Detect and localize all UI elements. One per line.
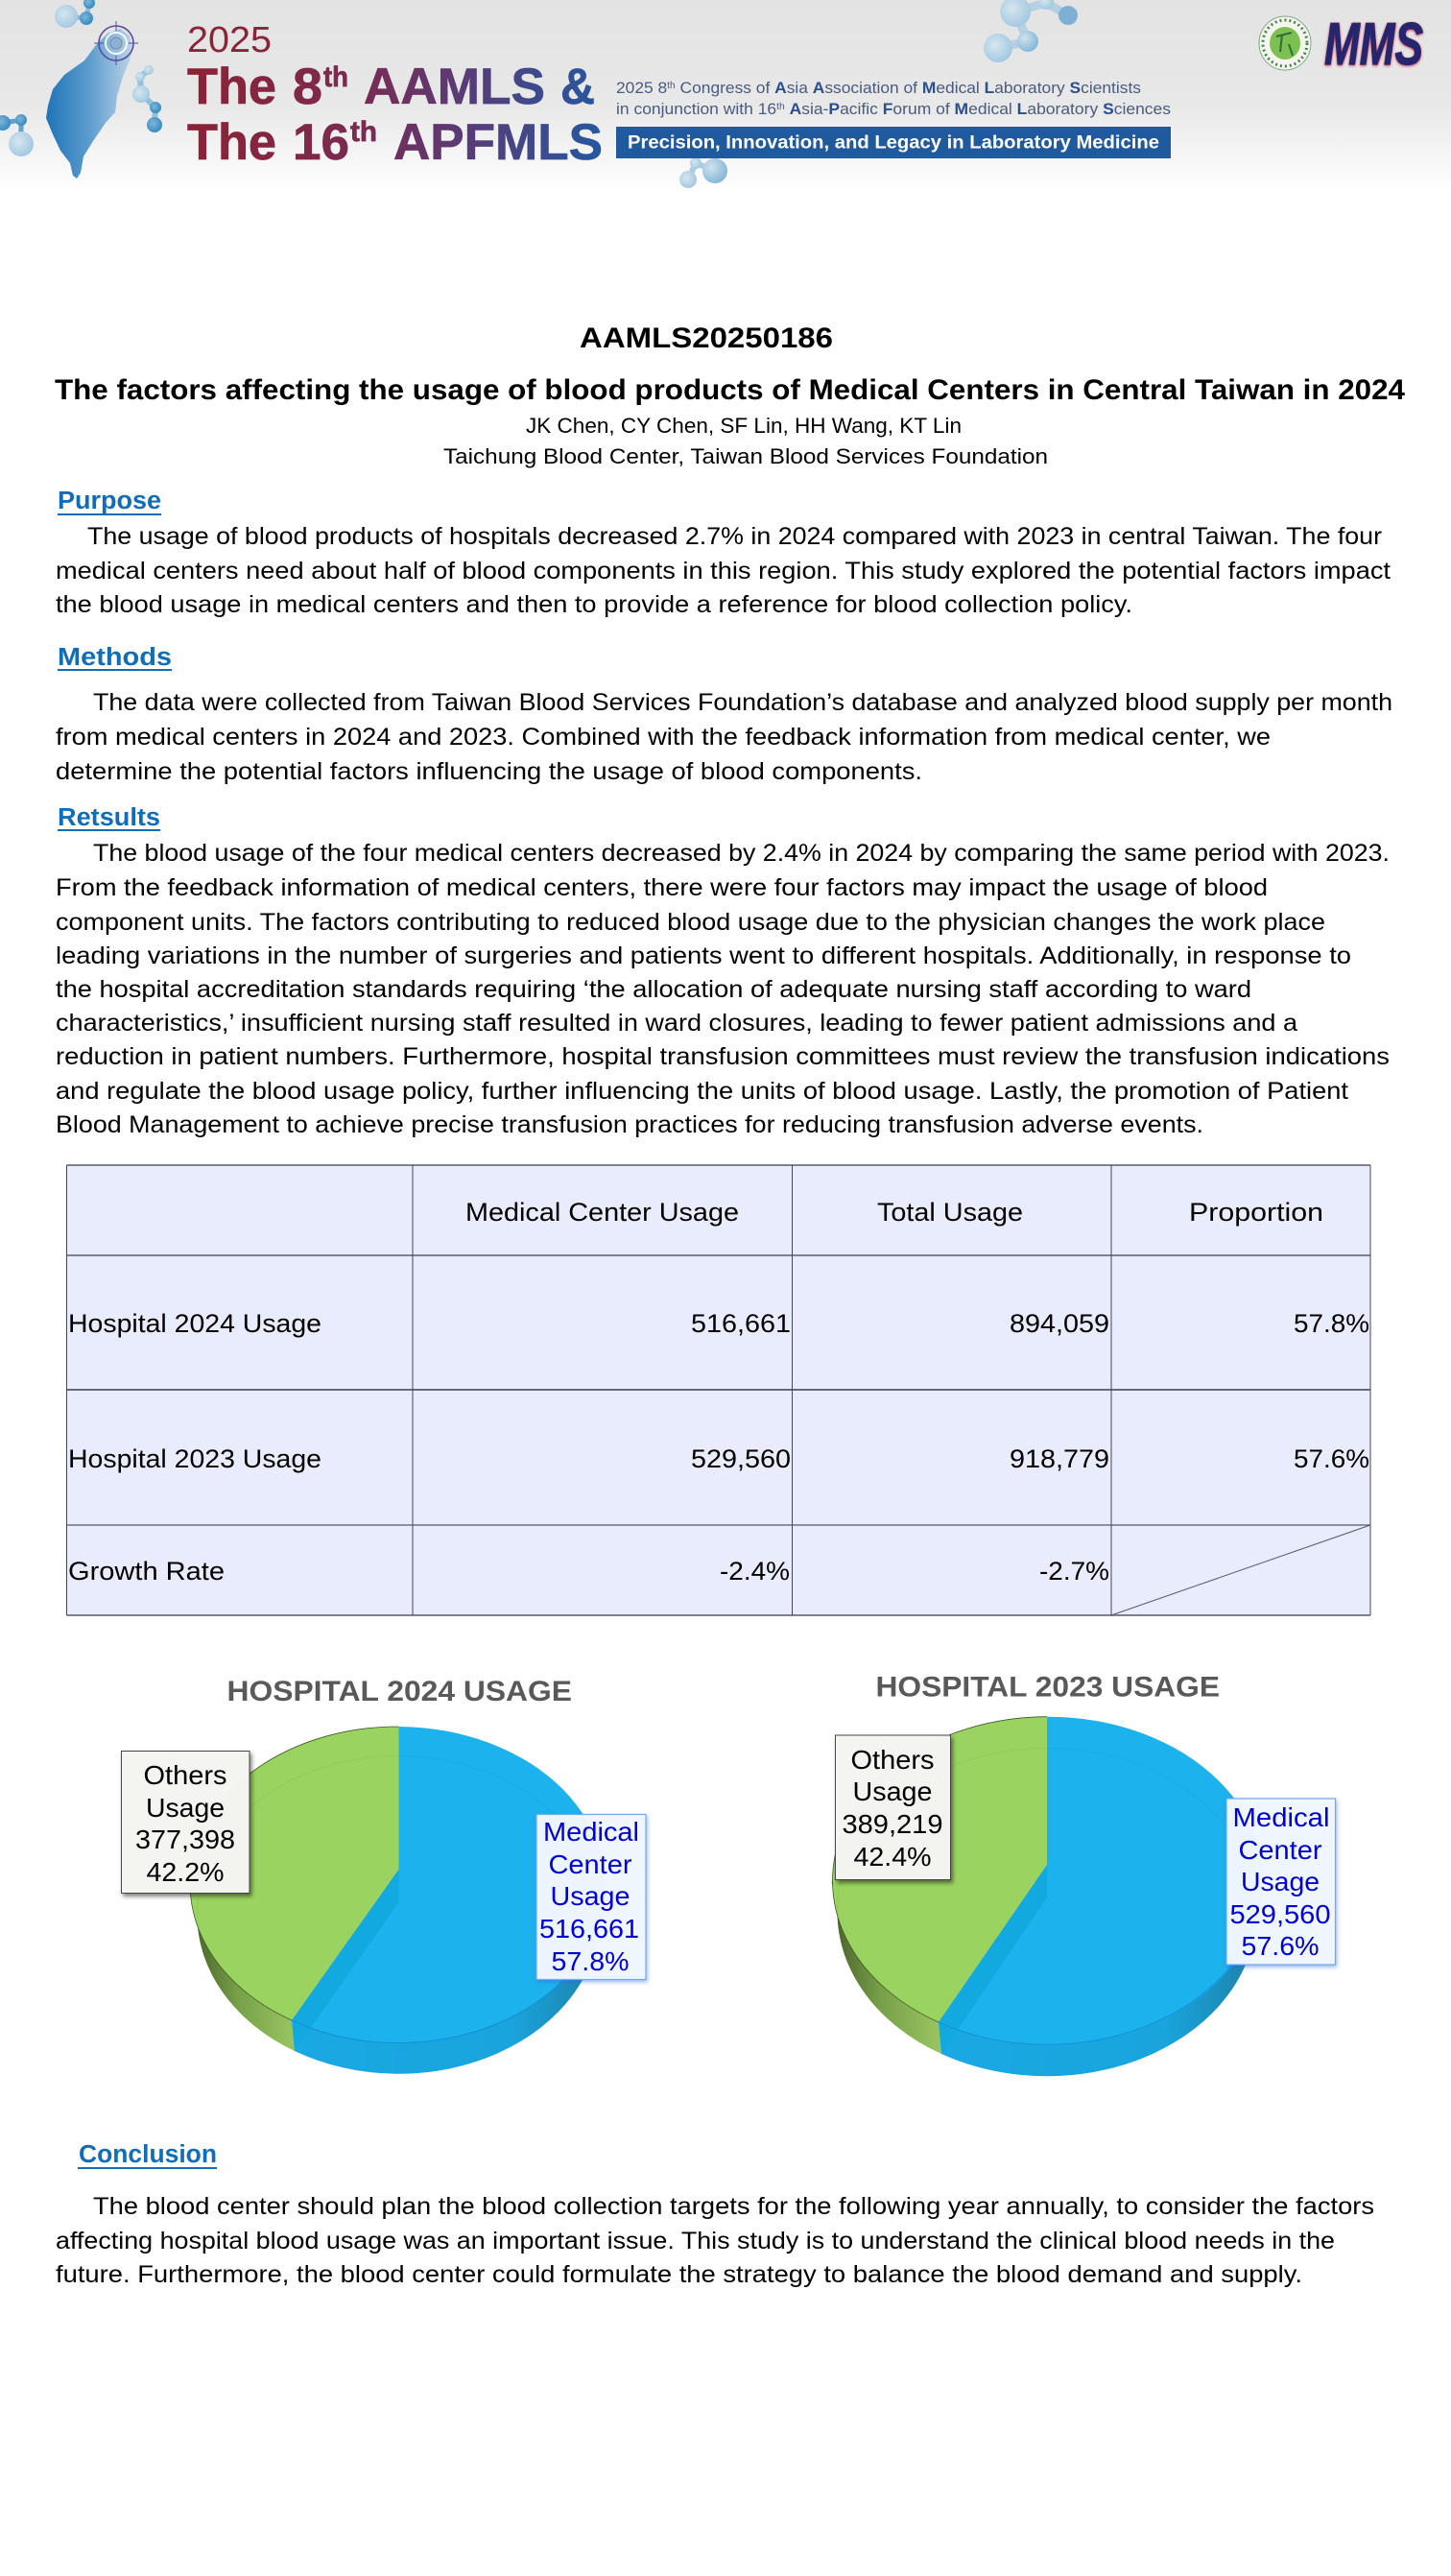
pie side walls — [191, 1885, 606, 2074]
label: medical center: 516,661 — [539, 1914, 639, 1944]
table row: Hospital 2024 Usage: 516,661 — [691, 1309, 791, 1338]
congress subtitle — [616, 79, 1171, 118]
text block: methods: from medical centers in 2024 and 2023. Combined with the feedback information from medical center, we — [56, 724, 1271, 751]
label: medical center — [1226, 1799, 1336, 1965]
heading: Conclusion: Conclusion — [79, 2141, 217, 2168]
conference name: APFMLS — [393, 114, 603, 171]
affiliation: Taichung Blood Center, Taiwan Blood Services Foundation — [443, 444, 1048, 468]
text block: results: Blood Management to achieve precise transfusion practices for reducing transfusion adverse events. — [56, 1111, 1203, 1138]
conference name: 8 — [293, 59, 322, 115]
label: medical center: 57.8% — [551, 1946, 630, 1976]
text block: results: From the feedback information of medical centers, there were four factors may impact the usage of blood — [56, 874, 1268, 901]
conference name: th — [323, 61, 348, 93]
heading: Purpose: Purpose — [58, 488, 161, 514]
label: medical center: 529,560 — [1230, 1899, 1330, 1929]
text block: purpose: The usage of blood products of hospitals decreased 2.7% in 2024 compared with 2023 in central Taiwan. The four — [87, 523, 1382, 550]
table header row: Total Usage — [877, 1198, 1023, 1227]
theme bar — [616, 127, 1171, 158]
text block: results: component units. The factors contributing to reduced blood usage due to the physician changes the work place — [56, 909, 1325, 936]
text block: results — [56, 840, 1390, 1138]
label: medical center: Center — [1238, 1835, 1322, 1865]
conference name — [187, 20, 603, 171]
text block: results: characteristics,’ insufficient nursing staff resulted in ward closures, leading to fewer patient admissions and a — [56, 1010, 1297, 1037]
slice: others — [833, 1717, 1047, 2022]
header banner — [0, 0, 1451, 192]
authors: JK Chen, CY Chen, SF Lin, HH Wang, KT Lin — [526, 414, 962, 438]
conference name: AAMLS — [364, 59, 545, 115]
conference name: 16 — [293, 114, 349, 171]
abstract ID: AAMLS20250186 — [580, 322, 833, 354]
label: others: Others — [144, 1760, 226, 1790]
label: medical center: Usage — [551, 1881, 630, 1911]
congress subtitle: Asia Association of Medical Laboratory Scientists — [774, 79, 1140, 97]
table row: Hospital 2023 Usage: Hospital 2023 Usage — [68, 1444, 321, 1473]
label: medical center: Center — [549, 1849, 631, 1879]
label: medical center — [536, 1814, 646, 1979]
text block: conclusion: affecting hospital blood usage was an important issue. This study is to understand the clinical blood needs in the — [56, 2228, 1335, 2254]
text block: purpose: medical centers need about half of blood components in this region. This study explored the potential factors impact — [56, 558, 1391, 584]
congress subtitle: 2025 8 — [616, 79, 666, 97]
slice: others — [190, 1727, 398, 2020]
pie chart: Hospital 2023 usage — [831, 1672, 1336, 2076]
text block: results: leading variations in the number of surgeries and patients went to different hospitals. Additionally, in response to — [56, 942, 1351, 969]
table row: Hospital 2024 Usage — [68, 1309, 1369, 1338]
label: others: Usage — [852, 1777, 933, 1806]
conference name: & — [560, 59, 595, 115]
label: medical center: 57.6% — [1242, 1931, 1319, 1961]
molecule: far left — [0, 114, 34, 156]
table row: Hospital 2023 Usage: 57.6% — [1294, 1444, 1369, 1473]
conference name: The — [187, 59, 276, 115]
slice: medical center — [292, 1727, 605, 2042]
congress subtitle: th — [776, 102, 785, 112]
pie chart: Hospital 2024 usage — [121, 1676, 646, 2074]
data table — [67, 1165, 1370, 1615]
text block: methods: determine the potential factors influencing the usage of blood components. — [56, 758, 922, 785]
title: The factors affecting the usage of blood products of Medical Centers in Central Taiwan in 2024 — [55, 374, 1405, 406]
molecule: top centre — [984, 0, 1078, 62]
table header row: Proportion — [1189, 1198, 1323, 1227]
conference name: th — [350, 116, 377, 148]
chart title: HOSPITAL 2023 USAGE — [875, 1672, 1220, 1703]
text block: methods — [56, 689, 1392, 785]
table row: Hospital 2024 Usage: Hospital 2024 Usage — [68, 1309, 321, 1338]
table row: Hospital 2023 Usage: 918,779 — [1010, 1444, 1109, 1473]
table row: Growth Rate: Growth Rate — [68, 1557, 225, 1586]
text block: results: reduction in patient numbers. Furthermore, hospital transfusion committees must review the transfusion indications — [56, 1043, 1390, 1070]
label: others: 389,219 — [843, 1809, 942, 1839]
text block: purpose: the blood usage in medical centers and then to provide a reference for blood collection policy. — [56, 591, 1132, 618]
table row: Growth Rate — [68, 1557, 1109, 1586]
text block: results: and regulate the blood usage policy, further influencing the units of blood usage. Lastly, the promotion of Patient — [56, 1078, 1348, 1105]
label: medical center: Medical — [543, 1817, 639, 1847]
text block: methods: The data were collected from Taiwan Blood Services Foundation’s database and analyzed blood supply per month — [93, 689, 1392, 716]
theme bar: Precision, Innovation, and Legacy in Laboratory Medicine — [628, 132, 1159, 154]
congress subtitle: in conjunction with 16 — [616, 100, 773, 118]
chart title: HOSPITAL 2024 USAGE — [226, 1676, 572, 1707]
conference name: 2025 — [187, 20, 272, 60]
label: others: 377,398 — [135, 1825, 235, 1854]
text block: purpose — [56, 523, 1391, 618]
table header row — [465, 1198, 1323, 1227]
label: others: Usage — [146, 1793, 225, 1823]
conference name: The — [187, 114, 276, 171]
table row: Hospital 2023 Usage — [68, 1444, 1369, 1473]
table row: Hospital 2024 Usage: 57.8% — [1294, 1309, 1369, 1338]
heading: Methods: Methods — [58, 644, 172, 671]
label: others: 42.4% — [854, 1842, 931, 1872]
label: others: Others — [850, 1745, 935, 1775]
molecule: bottom centre — [679, 157, 727, 188]
icon: Taiwan island map — [46, 29, 132, 179]
icon: location target — [94, 21, 138, 65]
table row: Growth Rate: -2.7% — [1039, 1557, 1109, 1586]
table row: Hospital 2023 Usage: 529,560 — [691, 1444, 791, 1473]
congress subtitle: Congress of — [676, 79, 774, 97]
molecule: top left — [55, 0, 95, 28]
table row: Hospital 2024 Usage: 894,059 — [1010, 1309, 1109, 1338]
slice: medical center — [939, 1717, 1264, 2045]
table row: Growth Rate: -2.4% — [720, 1557, 790, 1586]
congress subtitle: Asia-Pacific Forum of Medical Laboratory Sciences — [790, 100, 1169, 118]
text block: conclusion: The blood center should plan the blood collection targets for the following year annually, to consider the factors — [93, 2193, 1374, 2220]
label: others: 42.2% — [146, 1857, 225, 1887]
table header row: Medical Center Usage — [465, 1198, 739, 1227]
text block: conclusion — [56, 2193, 1374, 2288]
label: others — [121, 1751, 250, 1893]
label: others — [835, 1735, 950, 1879]
molecule: right of island — [132, 65, 162, 132]
text block: results: the hospital accreditation standards requiring ‘the allocation of adequate nursing staff according to ward — [56, 976, 1251, 1003]
label: medical center: Medical — [1232, 1802, 1330, 1832]
icon: society round logo — [1259, 16, 1311, 70]
heading: Retsults: Retsults — [58, 804, 160, 831]
congress subtitle: th — [667, 81, 676, 91]
pie side walls — [831, 1881, 1263, 2076]
text block: results: The blood usage of the four medical centers decreased by 2.4% in 2024 by comparing the same period with 2023. — [93, 840, 1390, 867]
text block: conclusion: future. Furthermore, the blood center could formulate the strategy to balance the blood demand and supply. — [56, 2261, 1302, 2288]
label: medical center: Usage — [1241, 1867, 1320, 1896]
